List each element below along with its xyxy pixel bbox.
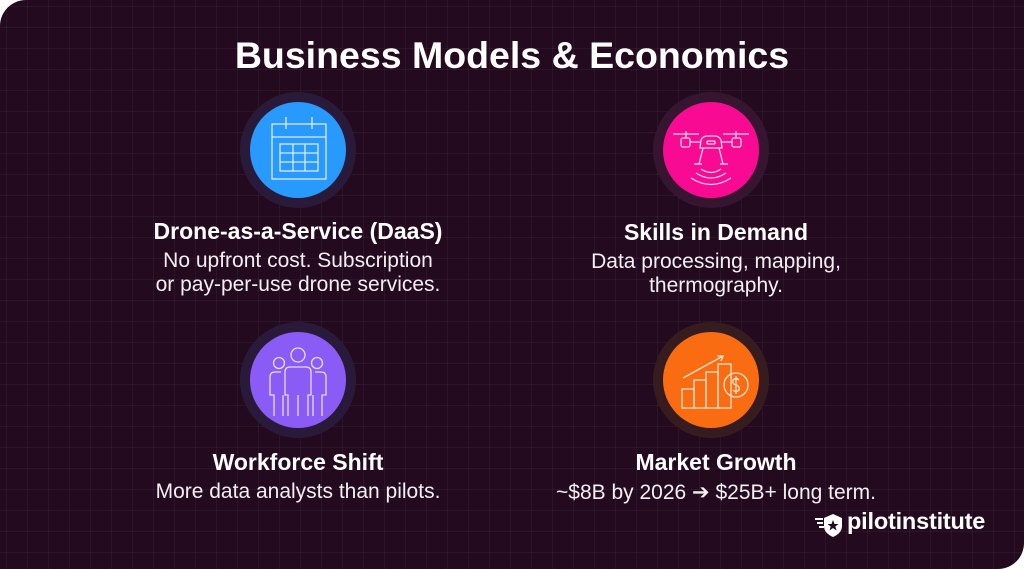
icon: growth chart (653, 322, 769, 438)
title: Business Models & Economics (235, 34, 789, 76)
heading: workforce: Workforce Shift (213, 449, 383, 475)
text: skills: Data processing, mapping, (591, 250, 841, 273)
text: skills (591, 250, 841, 297)
text: DaaS: No upfront cost. Subscription (163, 249, 433, 272)
icon: people (240, 322, 356, 438)
heading: market: Market Growth (635, 449, 797, 475)
text: skills: thermography. (649, 274, 783, 297)
icon: calendar (240, 92, 356, 208)
heading: DaaS: Drone-as-a-Service (DaaS) (154, 218, 442, 244)
text: market: ~$8B by 2026 ➔ $25B+ long term. (556, 481, 876, 504)
heading: skills: Skills in Demand (624, 219, 808, 245)
text: workforce: More data analysts than pilots. (156, 480, 440, 503)
text: DaaS: or pay-per-use drone services. (156, 273, 440, 296)
text: DaaS (156, 249, 440, 296)
logo: pilotinstitute: pilotinstitute (847, 508, 985, 534)
icon: drone (653, 92, 769, 208)
